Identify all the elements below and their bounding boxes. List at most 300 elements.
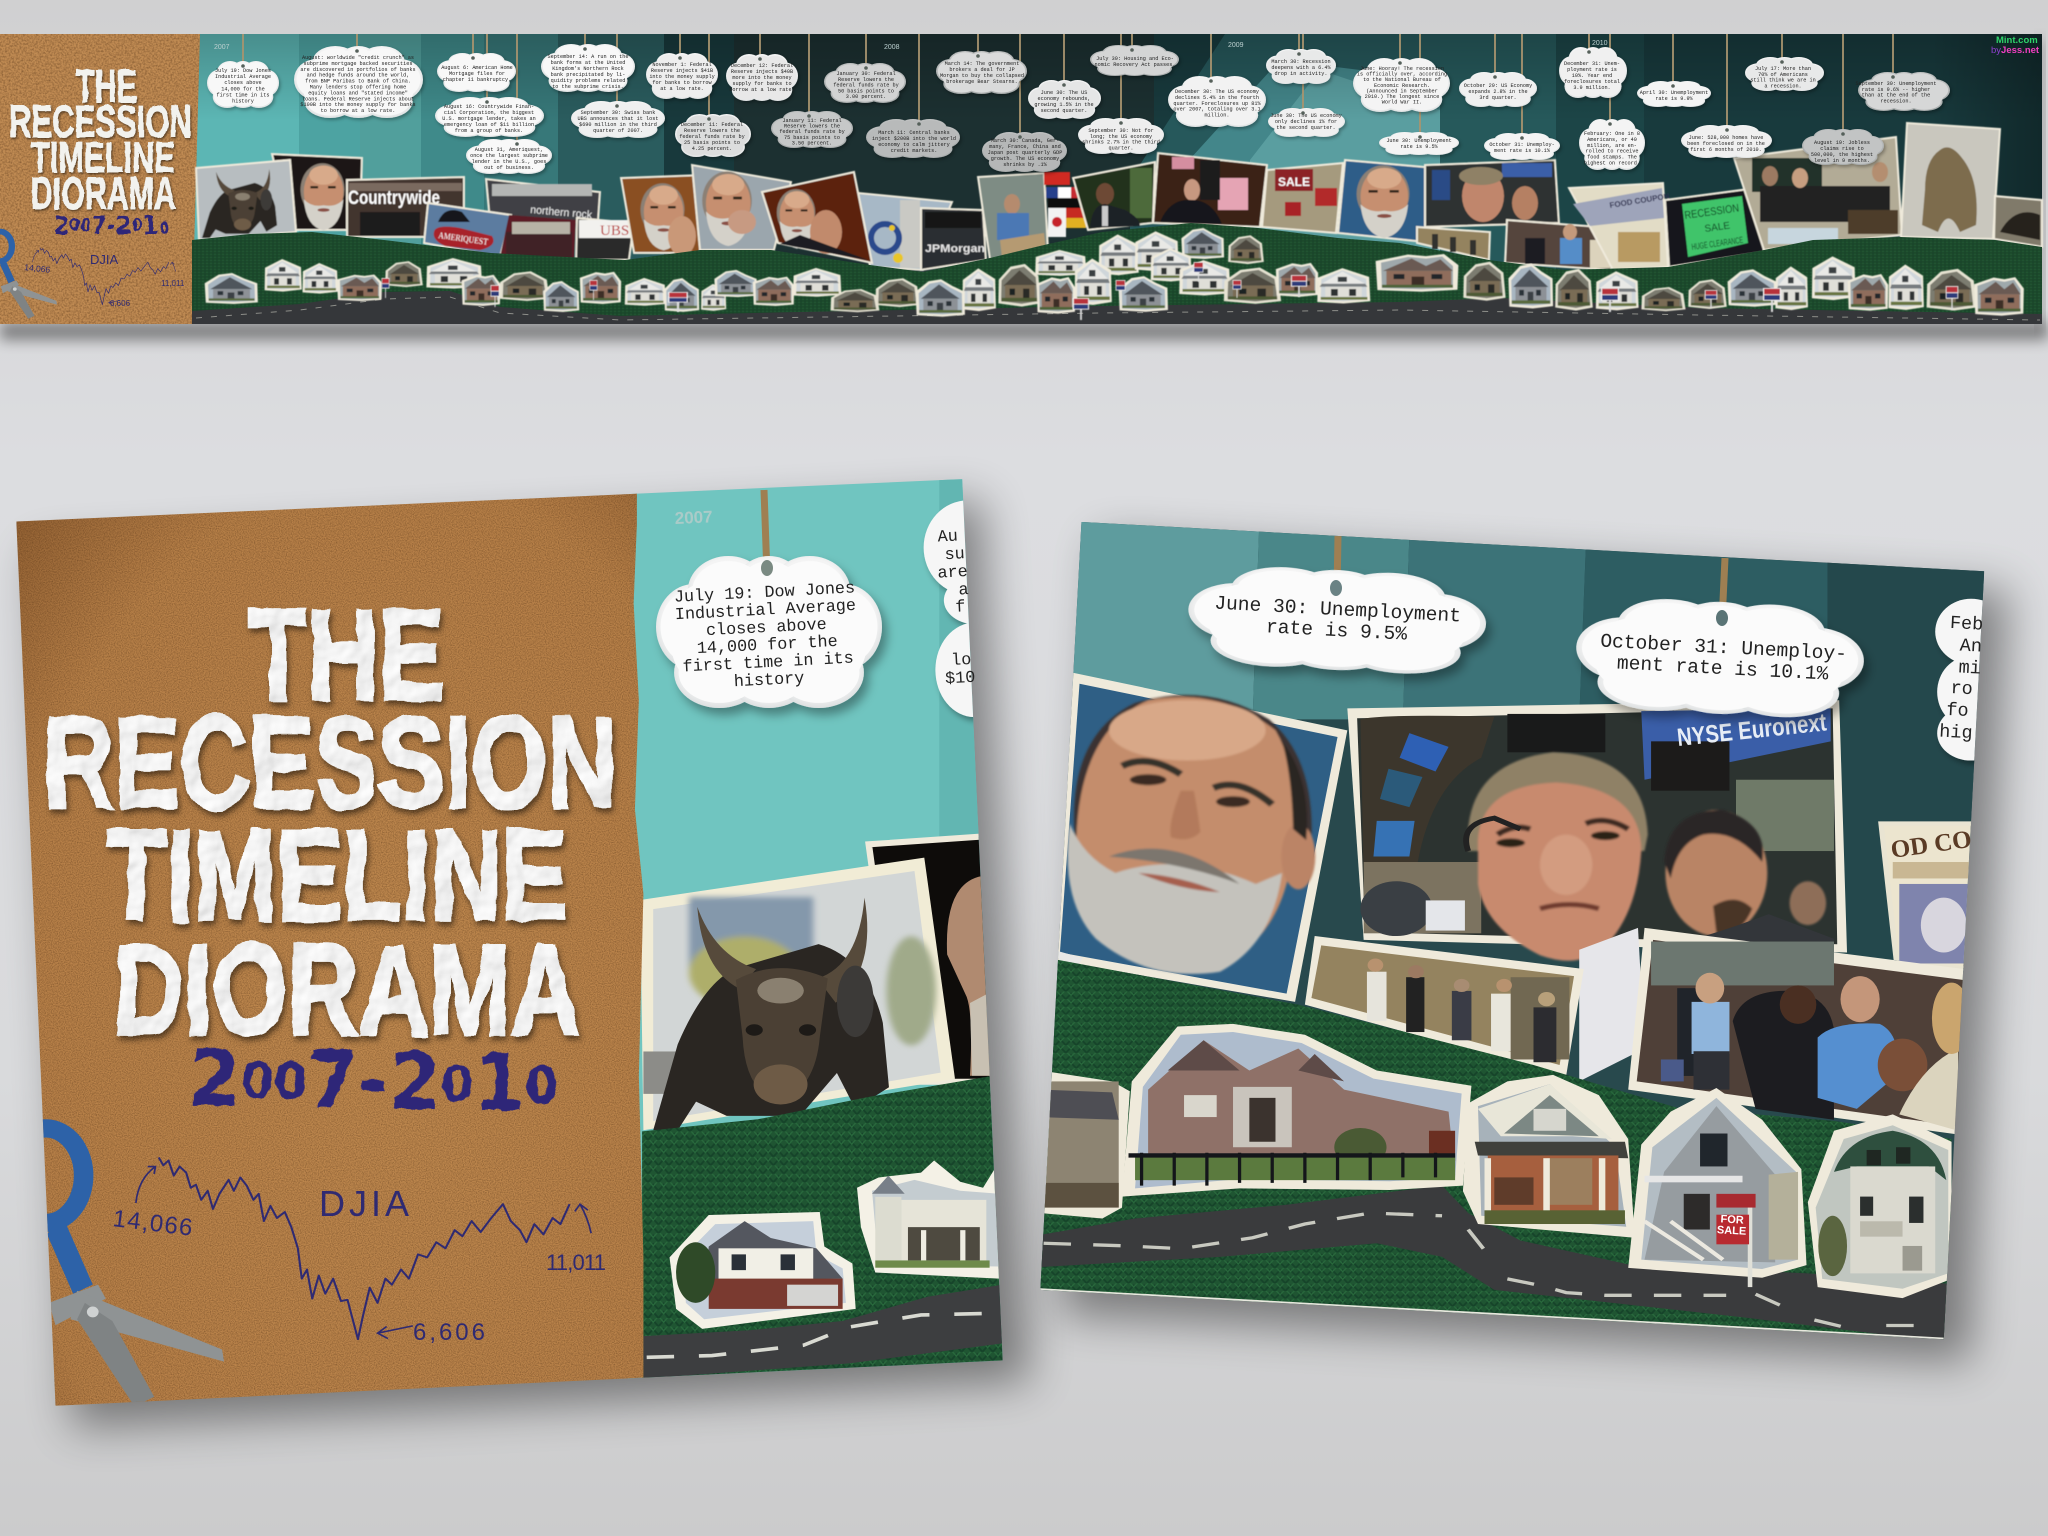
cloud: August 16: cial Corporation, the biggest [444, 110, 534, 116]
hanging cloud: July 19: history [733, 670, 805, 692]
chart labels: 6,606 [413, 1319, 485, 1346]
cloud: March 11: inject $200B into the world [872, 136, 956, 142]
cloud: December 30: quarter. Foreclosures up 81% [1173, 101, 1261, 107]
cloud: March 14: March 14: The government [945, 61, 1019, 67]
food coupon text: OD CO [1889, 826, 1973, 864]
cloud: February: rolled to receive [1586, 149, 1638, 155]
panel date range: 0 [440, 1055, 474, 1114]
house: foreclosed gray [1628, 1088, 1807, 1287]
cloud: September 30 2008 [1078, 118, 1164, 154]
cloud: July 19: closes above [224, 80, 262, 86]
cloud: January 11: federal funds rate by [779, 129, 845, 135]
cloud: August 6 [437, 53, 516, 92]
cloud: December 31 [1559, 47, 1627, 98]
cloud: January 11: Reserve lowers the [784, 124, 840, 130]
strip title: THE [76, 60, 137, 112]
cloud: July 19: July 19: Dow Jones [215, 68, 271, 74]
partial cloud text: February: Feb [1949, 613, 1984, 636]
hanging cloud: June 30 unemployment [1186, 536, 1488, 678]
cloud: January 11: 3.50 percent. [792, 140, 832, 146]
cloud: June hooray: to the National Bureau of [1363, 77, 1441, 83]
photo: people in line small [1305, 936, 1584, 1076]
strip title [9, 60, 192, 219]
cloud: September 14 [541, 44, 635, 92]
cloud: September 30 2010: September 30: Unemployment [1856, 81, 1936, 87]
cloud: July 19: 14,000 for the [221, 86, 265, 92]
cloud: August credit crunch: from BNP Paribas to Bank of China. [305, 79, 411, 85]
panel date range: 1 [473, 1039, 526, 1130]
strip DJIA sketch: 6,606 [110, 299, 131, 308]
cloud: June 30 2009: the second quarter. [1276, 125, 1336, 131]
darker teal band [939, 479, 978, 836]
cloud: March 14: brokerage Bear Stearns. [946, 79, 1018, 85]
cloud: September 14: quidity problems related [551, 78, 625, 84]
partial cloud text: August: f [955, 598, 966, 618]
DJIA line chart [136, 1157, 591, 1339]
strip date range: 0 [132, 215, 143, 236]
road [1024, 1186, 1958, 1342]
cloud: December 12: December 12: Federal [731, 63, 793, 69]
photo: food coupon partial [1881, 824, 1984, 972]
cloud: July 19: first time in its [217, 92, 269, 98]
cloud: August 16: from a group of banks. [455, 128, 523, 134]
house: mansion [1122, 1024, 1471, 1197]
strip photos collage [196, 123, 2042, 270]
cloud: August credit crunch: August: worldwide "credit crunch" as [302, 55, 414, 61]
cloud: December 31: 10%. Year end [1572, 73, 1612, 79]
strip title: RECESSION [9, 96, 192, 147]
house: brick suburban [670, 1212, 856, 1329]
cloud: June 30 2008: economy rebounds, [1038, 96, 1090, 102]
cloud: December 30: declines 5.4% in the fourth [1175, 95, 1259, 101]
panel date range: 7-2 [306, 1036, 441, 1128]
strip date range: 00 [70, 215, 91, 236]
partial cloud text: February: An [1959, 635, 1983, 658]
partial cloud text: August: lo [951, 651, 972, 671]
cloud: February: food stamps. The [1587, 155, 1637, 161]
cloud: October 29: expands 2.8% in the [1468, 89, 1528, 95]
cloud: August credit crunch [294, 46, 423, 118]
photo: recession sale sign: RECESSION [1684, 202, 1740, 222]
photo: food coupons [1569, 183, 1670, 270]
photo: euro sculpture [858, 193, 952, 270]
photo: recession sale sign [1665, 188, 1764, 267]
panel: enlarged detail of 2009 section [1024, 500, 2007, 1356]
cloud: December 12: borrow at a low rate. [729, 87, 795, 93]
photo: crowd [500, 215, 576, 260]
cloud: June 30 unemployment: June 30: Unemployment [1386, 138, 1452, 144]
cloud: September 14: September 14: A run on the [548, 54, 628, 60]
cloud: December 30 [1168, 76, 1266, 127]
hanging cloud: June 30 unemployment: June 30: Unemployment [1214, 593, 1461, 627]
cloud: December 31: foreclosures total [1564, 79, 1620, 85]
cloud: August 16: August 16: Countrywide Finan- [444, 104, 534, 110]
cloud: October 31: October 31: Unemploy- [1489, 142, 1555, 148]
cloud: October 31: ment rate is 10.1% [1494, 148, 1551, 154]
cloud: June hooray: is officially over, according [1357, 72, 1447, 78]
photo: traders [1425, 160, 1559, 227]
road [643, 1285, 1003, 1379]
cloud: December 30: over 2007, totaling over 3.1 [1173, 107, 1261, 113]
cloud: September 30 2008: quarter. [1109, 145, 1133, 151]
strip DJIA sketch: DJIA [90, 252, 118, 267]
chart labels [111, 1183, 606, 1346]
cloud: April 30 [1637, 81, 1711, 107]
cloud: June hooray: 2010.) The longest since [1365, 94, 1439, 100]
cloud: August 19: August 19: Jobless [1814, 140, 1870, 146]
hanging cloud: October 31 unemployment: ment rate is 10.1% [1616, 652, 1829, 686]
cloud: March 30 2009: drop in activity. [1275, 71, 1327, 77]
photo: job line [1505, 220, 1615, 270]
cloud: August credit crunch: $100B into the money supply for banks [300, 102, 416, 108]
photo: traders on floor [1347, 700, 1847, 1081]
hanging cloud: July 19 [656, 490, 882, 708]
cloud: December 11: Reserve lowers the [684, 128, 740, 134]
partial cloud shape: August [924, 500, 974, 724]
strip road [192, 291, 2042, 324]
cloud: September 30 2010: rate is 9.6% -- higher [1862, 87, 1930, 93]
cloud: December 12: Reserve injects $40B [731, 69, 793, 75]
year labels: 2010 [1592, 40, 1608, 47]
cloud: August 6: Mortgage files for [449, 71, 505, 77]
photo: jpmorgan [921, 208, 986, 270]
bernanke photo partial [869, 836, 993, 1082]
cloud: June 30 2008: second quarter. [1041, 108, 1087, 114]
cloud: July 30: nomic Recovery Act passes. [1095, 62, 1175, 68]
cloud: June 2010 [1681, 125, 1772, 158]
cloud: June 30 2009 [1268, 108, 1345, 137]
cloud: September 14: bank precipitated by li- [551, 72, 625, 78]
cream bottom edge [1040, 1290, 1944, 1339]
cloud: August 19 [1802, 129, 1884, 165]
hanging note clouds on strip [207, 44, 1950, 174]
right panel artwork [1024, 500, 2007, 1356]
year label 2007: 2007 [674, 507, 713, 528]
cloud: December 12: supply for banks to [732, 81, 792, 87]
photo: nyse bell ringing [1734, 137, 1902, 250]
cloud eyelets [241, 47, 1895, 146]
cloud: June hooray: World War II. [1382, 100, 1422, 106]
cloud: August credit crunch: equity loans and "stated income" [308, 90, 408, 96]
cloud: September 30 2010: than at the end of the [1862, 93, 1930, 99]
cloud: January 11 [771, 111, 853, 148]
strip scissors [0, 232, 57, 319]
partial cloud text: August: su [944, 545, 965, 565]
cloud: July 19: history [232, 98, 254, 104]
cloud: August 16 [435, 97, 544, 137]
cloud: December 11: 25 basis points to [684, 140, 740, 146]
panel: full timeline strip [0, 34, 2042, 324]
cloud: September 14: Kingdom's Northern Rock [552, 66, 624, 72]
cloud: October 29: 3rd quarter. [1479, 95, 1517, 101]
cloud: December 11 [675, 114, 751, 157]
cloud: September 30 UBS [571, 101, 665, 138]
scissors [8, 1128, 224, 1406]
cloud: March 30 G7: Japan post quarterly GDP [988, 150, 1062, 156]
photo: geithner protest [1153, 153, 1267, 227]
cloud: June 2010: been foreclosed on in the [1687, 141, 1765, 147]
cloud: April 30: rate is 9.9% [1655, 96, 1694, 102]
cloud: March 30 G7: March 30: Canada, Ger- [991, 138, 1059, 144]
cloud: September 30 2010: recession. [1880, 98, 1912, 104]
hanging cloud: July 19: first time in its [682, 650, 854, 677]
NYSE sign text: NYSE Euronext [1676, 708, 1828, 752]
cloud: January 30: 3.00 percent. [846, 94, 886, 100]
panel title: THE [248, 581, 444, 727]
cloud: March 30 G7: growth. The US economy [991, 156, 1059, 162]
cloud: June hooray: June: Hooray! The recession [1360, 66, 1444, 72]
panel: enlarged detail of title section [0, 470, 1014, 1415]
cloud: March 14 [936, 51, 1027, 94]
cloud: February: highest on record. [1584, 160, 1640, 166]
cloud: June hooray: (Announced in September [1366, 88, 1438, 94]
photo: ubs [576, 218, 634, 260]
cloud: February: million, are en- [1587, 143, 1637, 149]
cloud: July 19: Industrial Average [215, 74, 271, 80]
photo: bernanke 1 [272, 154, 362, 230]
partial cloud text: August: Au [937, 528, 958, 548]
strip for-sale signs [381, 262, 1958, 320]
hanging cloud: July 19: closes above [706, 616, 827, 641]
cloud: June 30 2008 [1028, 80, 1101, 119]
cloud: February [1579, 119, 1645, 170]
photo: northern rock: northern rock [530, 204, 593, 221]
photo: recession sale sign: SALE [1704, 220, 1731, 235]
hanging cloud: June 30 unemployment: rate is 9.5% [1265, 616, 1408, 646]
strip date range: 1 [143, 211, 158, 241]
year labels: 2007 [214, 44, 230, 51]
partial cloud text: August: a [958, 581, 969, 601]
FOR SALE sign text: FOR [1720, 1213, 1744, 1227]
cloud: August 31: once the largest subprime [470, 153, 548, 159]
cloud: August 16: U.S. mortgage lender, takes an [442, 116, 536, 122]
strip DJIA sketch: 14,066 [24, 262, 51, 275]
cloud: January 11: January 11: Federal [782, 118, 842, 124]
partial cloud text: February: mi [1958, 657, 1981, 680]
strip date range: 2 [54, 211, 72, 241]
cloud: July 17: still think we are in [1750, 78, 1816, 84]
cloud: March 30 G7 [982, 132, 1067, 172]
cloud: December 12 [726, 54, 798, 101]
cloud: January 30: 50 basis points to [838, 88, 894, 94]
hanging cloud: July 19: Industrial Average [674, 597, 856, 625]
cloud: February: February: One in 8 [1584, 131, 1640, 137]
cloud: August 31: August 31, Ameriquest, [475, 147, 543, 153]
cloud: January 30: Reserve lowers the [838, 77, 894, 83]
cloud: June 30 2008: growing 1.5% in the [1034, 102, 1094, 108]
cloud: July 30 [1090, 45, 1179, 76]
photo: bernanke smiling large [1053, 673, 1347, 1002]
cloud: March 14: Morgan to buy the collapsed [940, 73, 1024, 79]
cloud: April 30: April 30: Unemployment [1640, 90, 1708, 96]
cloud: January 11: 75 basis points to [784, 135, 840, 141]
partial cloud text: February: fo [1946, 700, 1969, 722]
panel date range: 2 [189, 1034, 244, 1125]
cloud: January 30 [824, 63, 906, 103]
hanging strings [243, 34, 1893, 145]
cloud: September 14: bank forms at the United [551, 60, 625, 66]
cloud: June 30 unemployment [1379, 132, 1459, 155]
credit: mint.com by jess.net [1991, 35, 2040, 56]
photo: job seekers line [1628, 928, 1984, 1136]
cloud: August 6: chapter 11 bankruptcy. [443, 77, 511, 83]
cloud: August 16: emergency loan of $11 billion [444, 122, 534, 128]
cloud: November 1 [646, 53, 718, 99]
cloud: August credit crunch: to borrow at a low rate. [321, 108, 395, 114]
strip backdrop: paper bands [190, 34, 2042, 324]
partial cloud shape: February [1935, 599, 2007, 761]
cloud: November 1: into the money supply [649, 74, 715, 80]
cloud: December 12: more into the money [732, 75, 792, 81]
hanging cloud: July 19: July 19: Dow Jones [674, 579, 856, 608]
photo: wall street bull [196, 160, 296, 240]
cloud: October 29 [1459, 72, 1537, 107]
panel title: RECESSION [44, 689, 617, 835]
cloud: July 17: a recession. [1764, 83, 1802, 89]
strip grass hill [192, 223, 2042, 324]
cloud: July 30: July 30: Housing and Eco- [1096, 56, 1174, 62]
cloud: August credit crunch: subprime mortgage backed securities [304, 61, 412, 67]
kraft paper with torn edge [0, 470, 643, 1415]
cloud: March 11 [866, 119, 960, 158]
cloud: September 30 2008: long; the US economy [1090, 134, 1152, 140]
cloud: September 30 UBS: $690 million in the third [579, 122, 657, 128]
cloud: October 29: October 29: US Economy [1464, 83, 1532, 89]
cloud: August credit crunch: and hedge funds around the world, [307, 73, 409, 79]
chart labels: DJIA [319, 1183, 409, 1224]
cloud: August credit crunch: are discovered in portfolios of banks [300, 67, 416, 73]
panel date range: 0 [525, 1057, 559, 1115]
cloud: December 11: December 11: Federal [681, 122, 743, 128]
cloud: July 17: 70% of Americans [1758, 72, 1808, 78]
cloud: March 30 G7: shrinks by .1% [1003, 162, 1048, 168]
house: green gambrel [1808, 1114, 1952, 1298]
left panel shadow [36, 500, 1030, 1428]
hanging cloud: October 31 unemployment: October 31: Unemploy- [1600, 631, 1847, 665]
credit: mint.com by jess.net: Mint.com [1996, 35, 2038, 46]
strip title: TIMELINE [31, 134, 175, 182]
cloud: January 30: January 30: Federal [836, 71, 896, 77]
photo: recession sale sign: HUGE CLEARANCE [1691, 235, 1744, 252]
cloud: August 31: lender in the U.S., goes [472, 159, 546, 165]
cloud: November 1: at a low rate. [660, 86, 704, 92]
cloud: August 19: claims rise to [1820, 146, 1864, 152]
left panel artwork [0, 470, 1014, 1415]
strip row of houses [205, 228, 2024, 317]
strip date range: 0 [158, 218, 169, 239]
photo: jpmorgan: JPMorgan [925, 243, 985, 255]
cloud: June 30 unemployment: rate is 9.5% [1400, 144, 1439, 150]
photo: countrywide: Countrywide [348, 188, 440, 209]
partial cloud text: February: ro [1950, 678, 1973, 700]
cloud: December 30: million. [1205, 113, 1229, 119]
panel date range: 00 [240, 1052, 307, 1111]
cloud: June 30 2009: only declines 1% for [1275, 119, 1337, 125]
cloud: June hooray [1353, 58, 1450, 112]
partial cloud text: August: are [937, 563, 968, 584]
photo: bernanke 4 [762, 172, 872, 263]
photo: stock up sale: SALE [1278, 175, 1310, 189]
panel title [44, 581, 617, 1062]
photo: man carrying box [978, 173, 1048, 260]
photo: bernanke smiling [1338, 160, 1425, 242]
cloud: September 30 2010 [1856, 72, 1950, 111]
photo: bull from behind [1901, 123, 2000, 239]
year labels [214, 40, 1608, 51]
hanging cloud: July 19: 14,000 for the [696, 633, 838, 659]
year labels: 2009 [1228, 42, 1244, 49]
cloud: August credit crunch: Many lenders stop offering home [310, 84, 406, 90]
photo: countrywide [347, 177, 464, 237]
photo: stock up sale [1262, 163, 1343, 233]
photo: bernanke 3 [692, 165, 791, 250]
cloud: February: Americans, or 40 [1587, 137, 1637, 143]
cloud: June 2010: June: 528,000 homes have [1689, 135, 1763, 141]
photo: ubs: UBS [600, 223, 629, 239]
cloud: March 11: March 11: Central banks [878, 130, 950, 136]
cloud: June hooray: Economic Research. [1374, 83, 1430, 89]
cloud: June 30 2008: June 30: The US [1041, 90, 1087, 96]
cloud: September 30 UBS: quarter of 2007. [593, 128, 643, 134]
cloud: September 30 UBS: September 30: Swiss bank [581, 110, 655, 116]
year labels: 2008 [884, 44, 900, 51]
cloud: November 1: for banks to borrow [652, 80, 712, 86]
cloud: July 17: July 17: More than [1755, 66, 1811, 72]
paper bands backdrop [1024, 500, 2004, 1356]
cloud: July 19 [207, 61, 279, 108]
panel title: DIORAMA [114, 919, 581, 1062]
cloud: September 30 UBS: UBS announces that it lost [578, 116, 658, 122]
photo: northern rock [486, 179, 600, 222]
cloud: June 2010: first 6 months of 2010. [1690, 147, 1762, 153]
right panel shadow [1060, 540, 2008, 1362]
grass hill [1024, 955, 1952, 1345]
grass [642, 1076, 1003, 1378]
strip kraft title panel [0, 34, 200, 324]
cloud: August 19: level in 9 months. [1814, 158, 1870, 164]
cloud: March 30 2009 [1266, 49, 1336, 84]
house: white victorian [857, 1160, 999, 1279]
cloud: March 14: brokers a deal for JP [949, 67, 1015, 73]
cloud: July 17 [1745, 57, 1824, 91]
cloud: December 30: December 30: The US economy [1175, 89, 1259, 95]
cloud: March 30 G7: many, France, China and [989, 144, 1061, 150]
cloud: March 30 2009: deepens with a 6.4% [1271, 65, 1331, 71]
photo: obama signing [1073, 162, 1155, 230]
cloud: August 31: out of business. [484, 165, 534, 171]
cloud: December 31: 3.9 million. [1573, 85, 1611, 91]
cloud: October 31 [1484, 133, 1560, 160]
strip DJIA sketch [24, 248, 185, 308]
panel title: TIMELINE [106, 804, 568, 947]
photo: ameriquest: AMERIQUEST [438, 230, 489, 247]
photo: people in line [1417, 227, 1490, 260]
cloud: March 11: economy to calm jittery [878, 142, 950, 148]
photo: last storefront [1994, 196, 2042, 247]
cloud: August 19: 500,000, the highest [1811, 152, 1873, 158]
cloud: March 11: credit markets. [891, 148, 937, 154]
chart labels: 11,011 [546, 1250, 606, 1275]
partial cloud text: February: hig [1939, 722, 1973, 744]
chart labels: 14,066 [111, 1205, 194, 1242]
photo: food coupons: FOOD COUPON [1609, 192, 1670, 210]
cloud: September 30 2008: September 30: Not for [1088, 128, 1154, 134]
cloud: December 11: 4.25 percent. [692, 146, 732, 152]
strip DJIA sketch: 11,011 [161, 279, 185, 288]
house: green porch bungalow [1463, 1075, 1635, 1238]
hanging cloud: October 31 unemployment [1573, 558, 1867, 721]
cloud: September 14: to the subprime crisis. [552, 84, 624, 90]
